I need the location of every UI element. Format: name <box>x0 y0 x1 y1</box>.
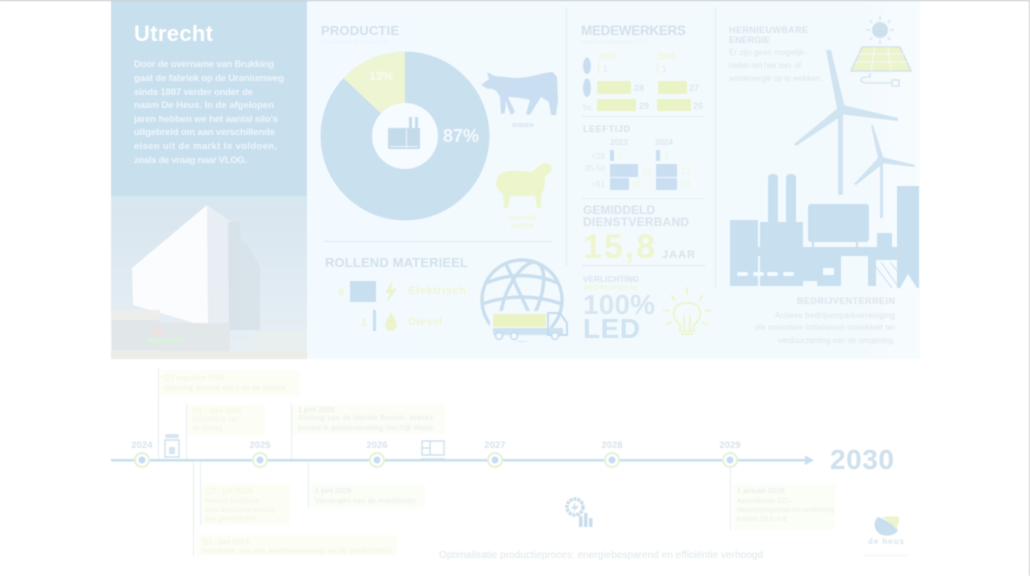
node: 2025 <box>249 440 271 467</box>
callout: 1 juni 2024: de opslag <box>192 425 222 432</box>
photo: factory building <box>111 196 307 359</box>
callout: 1 juni 2025: Sluiting van de fabriek Bunnik, brakke <box>298 415 433 422</box>
node: 2027 <box>484 440 506 467</box>
node: 2026: 2026 <box>366 440 388 451</box>
text block: bedrijventerrein: Actieve bedrijvenparkvereniging <box>775 311 895 320</box>
text block: bedrijventerrein: BEDRIJVENTERREIN <box>797 296 895 306</box>
heading: Utrecht: Utrecht <box>134 21 214 46</box>
chart: medewerkers bars: 29 <box>639 101 649 111</box>
callout: Q3 juli 2025: van grondstoffen <box>205 516 257 523</box>
text block: bedrijventerrein: die meerdere initiatieven ontwikkelt ter <box>755 323 895 332</box>
text block: intro: uitgebreid om aan verschillende <box>134 127 275 138</box>
text block: intro <box>133 59 284 166</box>
callout: Q3 augustus 2024: Opening nieuwe silo's op de fabriek <box>164 383 286 392</box>
divider <box>324 241 552 242</box>
text block: energie <box>728 48 822 83</box>
callout: 1 juni 2026: 1 juni 2026 <box>315 486 352 495</box>
callout: 1 juni 2024 <box>187 405 265 436</box>
icon: gear with bars <box>567 499 592 527</box>
node: 2026 <box>366 440 388 467</box>
row: elektrisch: Elektrisch <box>408 285 466 297</box>
chart: donut 87/13 <box>320 51 490 220</box>
text block: intro: zoals de vraag naar VLOG. <box>134 155 247 166</box>
icon: sheep: GEITEN <box>511 224 533 230</box>
text block: intro: jaren hebben we het aantal silo's <box>133 114 278 125</box>
chart: leeftijd bars: >51 <box>591 180 606 189</box>
icon: globe with truck <box>482 257 567 343</box>
caption: medewerkers: Aantal medewerkers FTE <box>581 39 650 46</box>
callout: 1 januari 2029: 1 januari 2029 <box>737 486 785 495</box>
chart: medewerkers bars: 27 <box>689 83 699 93</box>
node: 2024: 2024 <box>131 440 153 451</box>
chart: leeftijd bars: 16 <box>642 167 651 176</box>
timeline: axis <box>111 440 814 467</box>
chart: leeftijd bars: 3 <box>618 152 623 161</box>
icon: factory silhouette <box>730 174 919 288</box>
callout: 1 januari 2029: reductieprojecten en verlichting <box>737 507 834 514</box>
logo: de heus <box>864 516 908 556</box>
chart: medewerkers bars: 26 <box>693 101 703 111</box>
stat: gemiddeld dienstverband: GEMIDDELD <box>583 203 655 217</box>
heading: Rollend materieel: ROLLEND MATERIEEL <box>325 255 468 270</box>
label: 87%: 87% <box>443 126 479 146</box>
caption: productieproces: Optimalisatie productieproces: energiebesparend en efficiëntie verhoogd <box>439 550 763 561</box>
stat: verlichting 100% LED <box>583 275 655 344</box>
callout: 1 juni 2026: Vervangen van de machinelijn <box>315 498 416 505</box>
caption: schapen: SCHAPEN <box>507 216 537 222</box>
stat: gemiddeld dienstverband: DIENSTVERBAND <box>583 215 689 229</box>
chart: medewerkers bars: 1 <box>662 65 667 74</box>
stat: gemiddeld dienstverband: 15,8 <box>583 228 655 266</box>
stat: gemiddeld dienstverband <box>583 203 695 266</box>
icon: sheep <box>496 163 552 230</box>
node: 2027: 2027 <box>484 440 506 451</box>
icon: solar panel <box>851 47 911 86</box>
node: 2025: 2025 <box>249 440 271 451</box>
text block: energie: windenergie op te wekken. <box>728 74 822 83</box>
text block: intro: naam De Heus. In de afgelopen <box>134 100 274 111</box>
text block: energie: Er zijn geen mogelijk- <box>729 48 807 57</box>
text: ENERGIE <box>729 35 770 45</box>
icon: silo <box>165 434 179 457</box>
panel: infographic background <box>307 1 920 359</box>
chart: leeftijd bars: 13 <box>681 180 690 189</box>
text block: bedrijventerrein: verduurzaming van de omgeving. <box>778 336 895 345</box>
chart: leeftijd bars: 35-50 <box>585 164 606 173</box>
row: diesel <box>361 310 442 331</box>
stat: gemiddeld dienstverband: JAAR <box>662 249 695 261</box>
callout: Q3 juli 2025: voor duurzame opslag <box>205 507 274 514</box>
callout: 1 januari 2029: kosten 10,3 m € <box>737 516 787 523</box>
chart: medewerkers bars: 2023 <box>598 52 616 61</box>
callout: 1 juni 2024: Uitbreiding van <box>192 416 239 423</box>
icon: light bulb <box>663 287 711 334</box>
callout: 1 juni 2025 <box>292 405 445 434</box>
caption: productie: Hoeveelheid in ton (%) <box>321 39 389 46</box>
chart: medewerkers bars <box>582 52 703 112</box>
row: elektrisch <box>338 279 466 303</box>
heading: Hernieuwbare energie: HERNIEUWBARE <box>729 25 808 35</box>
icon: sun <box>866 16 894 44</box>
chart: medewerkers bars: Tot. <box>582 105 593 112</box>
callout: Q3 augustus 2024: Q3 augustus 2024 <box>164 373 225 382</box>
panel: Utrecht intro <box>111 1 307 196</box>
text block: intro: Door de overname van Brukking <box>134 59 274 70</box>
stat: verlichting 100% LED: 100% <box>583 289 655 320</box>
callout: 1 januari 2029 <box>733 484 835 530</box>
callout: Q3 juli 2025 <box>201 484 290 525</box>
callout: 1 juni 2024: Q1 - april 2025 <box>192 406 242 415</box>
node: 2028 <box>601 440 623 467</box>
icon: cow <box>481 72 558 129</box>
chart: medewerkers bars: 1 <box>603 65 608 74</box>
node: 2028: 2028 <box>601 440 623 451</box>
chart: leeftijd bars: 3 <box>664 152 669 161</box>
icon: wind turbines <box>794 50 915 218</box>
chart: medewerkers bars: 2024 <box>657 52 675 61</box>
row: diesel: Diesel <box>408 316 442 328</box>
chart: leeftijd bars: 2024 <box>655 138 673 147</box>
row: diesel: 1 <box>361 317 367 329</box>
heading: Medewerkers: MEDEWERKERS <box>581 23 686 38</box>
heading: Productie: PRODUCTIE <box>321 23 399 38</box>
callout: Q1 juni 2024: Q1 - juni 2024 <box>202 537 249 546</box>
chart: leeftijd bars: 13 <box>681 167 690 176</box>
stat: verlichting 100% LED: BEDRIJFSHAL <box>583 285 639 292</box>
callout: 1 juni 2026 <box>311 484 425 508</box>
node: 2024 <box>131 440 153 467</box>
label: 2030: 2030 <box>830 444 894 475</box>
callout: Q3 augustus 2024 <box>160 370 300 396</box>
text block: bedrijventerrein <box>755 296 895 345</box>
callout: 1 juni 2025: bemest in gemeenteveiling Van Dijk Waals <box>298 425 434 432</box>
callout: Q3 juli 2025: Q3 - juli 2026 <box>205 487 253 496</box>
node: 2029: 2029 <box>719 440 741 451</box>
timeline: callout connectors <box>158 368 730 556</box>
callout: 1 juni 2025: 1 juni 2025 <box>298 405 335 414</box>
chart: leeftijd bars: <29 <box>591 152 606 161</box>
chart: leeftijd bars: 2023 <box>610 138 628 147</box>
callout: 1 januari 2029: Aanvullende CO₂- <box>737 498 794 505</box>
text block: intro: eisen uit de markt te voldoen, <box>134 141 277 152</box>
callout: Q3 juli 2025: Nieuwe installatie <box>205 498 260 505</box>
label: 13%: 13% <box>369 69 393 83</box>
icon: factory <box>388 117 420 149</box>
stat: verlichting 100% LED: LED <box>583 313 640 344</box>
logo: de heus: de heus <box>868 537 905 546</box>
row: elektrisch: 8 <box>338 287 344 299</box>
text block: intro: gaat de fabriek op de Uraniumweg <box>134 73 284 84</box>
icon: transport cart <box>421 441 445 459</box>
chart: leeftijd bars: 10 <box>632 180 641 189</box>
node: 2029 <box>719 440 741 467</box>
chart: medewerkers bars: 28 <box>634 83 644 93</box>
callout: Q1 juni 2024 <box>197 535 397 556</box>
text block: energie: heden om hier zon- of <box>729 61 802 70</box>
text block: intro: sinds 1887 verder onder de <box>134 87 253 98</box>
heading: Leeftijd: LEEFTIJD <box>583 124 630 134</box>
chart: leeftijd bars <box>585 138 690 190</box>
callout: Q1 juni 2024: Installatie van een warmtewisselaar op de productielijn <box>202 548 392 555</box>
caption: koeien: KOEIEN <box>512 123 534 129</box>
stat: verlichting 100% LED: VERLICHTING <box>583 275 639 284</box>
